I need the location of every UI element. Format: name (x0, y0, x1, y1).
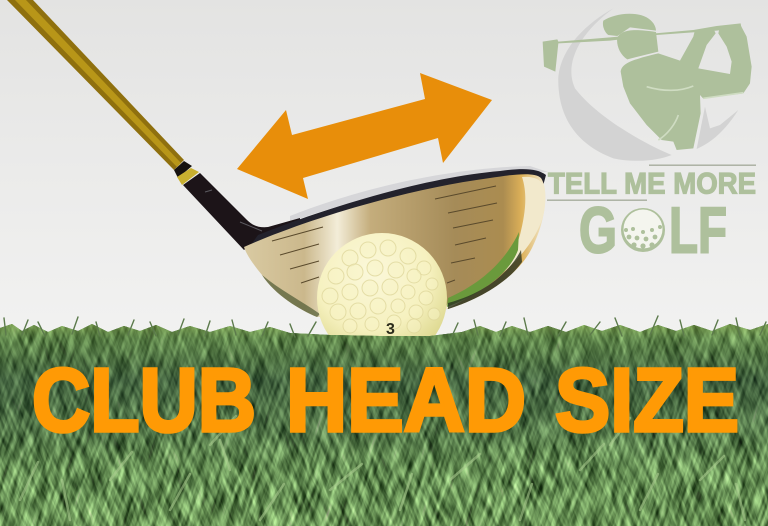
crown rim (250, 169, 546, 246)
logo golf club (543, 23, 741, 72)
logo golf ball (621, 208, 665, 252)
club head (244, 169, 546, 317)
grass blade tips along top edge (4, 316, 766, 337)
title word SIZE: SIZE (555, 351, 739, 451)
golfer body and arms (621, 24, 752, 150)
logo: Tell Me More Golf (543, 8, 756, 267)
golfer cap (603, 14, 656, 36)
title word HEAD: HEAD (286, 351, 526, 451)
studio background (0, 0, 768, 345)
logo wordmark G: G (579, 194, 617, 266)
lower face shadow (262, 275, 320, 317)
ball number: 3 (386, 321, 395, 338)
logo rule top (649, 164, 756, 166)
logo rule bottom (547, 200, 647, 201)
ball body (317, 233, 447, 363)
title word CLUB: CLUB (32, 351, 256, 451)
ball dimples (322, 240, 440, 333)
golf club (7, 0, 300, 250)
logo golfer silhouette (543, 14, 752, 150)
crown halo (290, 166, 548, 222)
grass texture (0, 318, 768, 526)
size arrow (237, 73, 492, 199)
golfer body highlights (647, 86, 743, 140)
club face (244, 174, 545, 317)
light grass blades (20, 416, 745, 520)
logo wordmark top: TELL ME MORE (548, 168, 756, 200)
face score lines (272, 186, 497, 283)
golfer head (617, 30, 658, 59)
club hosel (183, 173, 300, 250)
golf ball (317, 233, 447, 363)
logo wordmark LF: LF (669, 194, 727, 266)
logo swoosh (558, 8, 738, 161)
club ferrule (174, 161, 199, 185)
chrome toe reflection (445, 177, 546, 312)
club shaft (7, 0, 184, 170)
title: CLUB HEAD SIZE (32, 351, 739, 451)
grass field (0, 316, 768, 526)
logo swoosh and golfer (543, 8, 752, 161)
